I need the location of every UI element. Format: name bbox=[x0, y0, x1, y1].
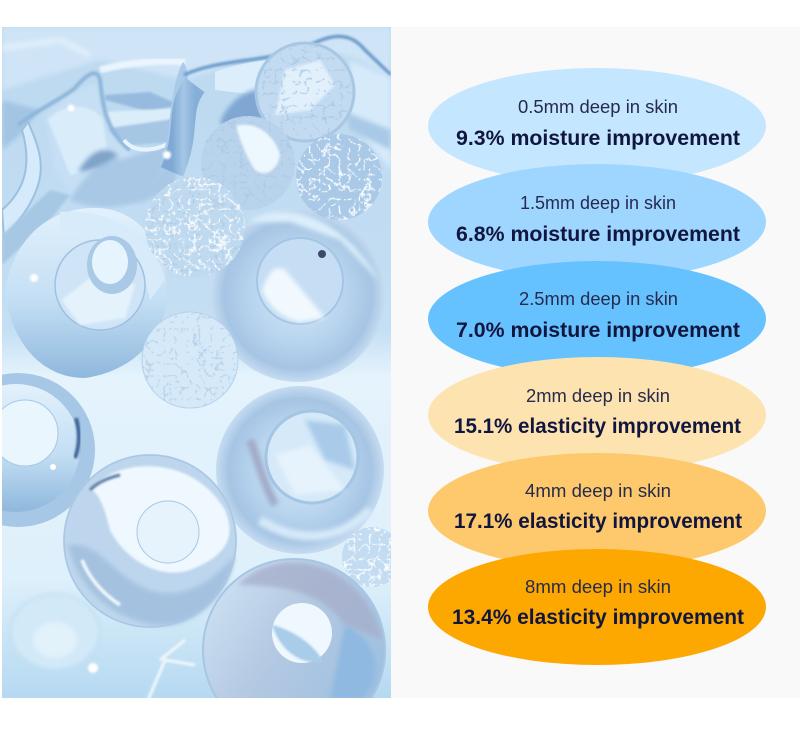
ellipse: 2.5mm moisture bbox=[428, 261, 766, 377]
ellipse: 0.5mm moisture bbox=[428, 68, 766, 184]
ellipse: 2mm elasticity bbox=[428, 357, 766, 473]
ellipse: 1.5mm moisture: 6.8% moisture improvement bbox=[456, 223, 740, 246]
ellipse: 2.5mm moisture: 2.5mm deep in skin bbox=[519, 289, 678, 309]
soft blob lower left bbox=[10, 594, 195, 700]
ellipse: 1.5mm moisture bbox=[428, 164, 766, 280]
bubble: bottom grey bbox=[202, 558, 386, 698]
ellipse: 8mm elasticity: 8mm deep in skin bbox=[525, 577, 671, 597]
bubble: small right bbox=[342, 527, 391, 587]
bubble: big left bbox=[5, 208, 167, 378]
ellipse: 2mm elasticity: 15.1% elasticity improvement bbox=[454, 415, 741, 438]
bubble: big right bbox=[211, 208, 385, 382]
bubble: centre bbox=[63, 454, 237, 628]
ellipse: 1.5mm moisture: 1.5mm deep in skin bbox=[520, 193, 676, 213]
ellipse: 4mm elasticity bbox=[428, 453, 766, 569]
top gel waves bbox=[2, 27, 391, 265]
crumpled bubbles bbox=[142, 43, 382, 408]
ellipse: 8mm elasticity bbox=[428, 549, 766, 665]
ellipse: 2.5mm moisture: 7.0% moisture improvement bbox=[456, 319, 740, 342]
bubble: lower right bbox=[216, 386, 384, 554]
ellipse: 0.5mm moisture: 9.3% moisture improvement bbox=[456, 127, 740, 150]
bubble: lower left bbox=[0, 373, 95, 527]
ellipse: 2mm elasticity: 2mm deep in skin bbox=[526, 386, 670, 406]
right panel background bbox=[391, 27, 800, 698]
ellipse: 4mm elasticity: 17.1% elasticity improvement bbox=[454, 510, 742, 533]
ellipse: 4mm elasticity: 4mm deep in skin bbox=[525, 481, 671, 501]
photo: water gel bubbles bbox=[0, 27, 402, 740]
ellipse: 0.5mm moisture: 0.5mm deep in skin bbox=[518, 97, 678, 117]
ellipse: 8mm elasticity: 13.4% elasticity improvement bbox=[452, 606, 744, 629]
